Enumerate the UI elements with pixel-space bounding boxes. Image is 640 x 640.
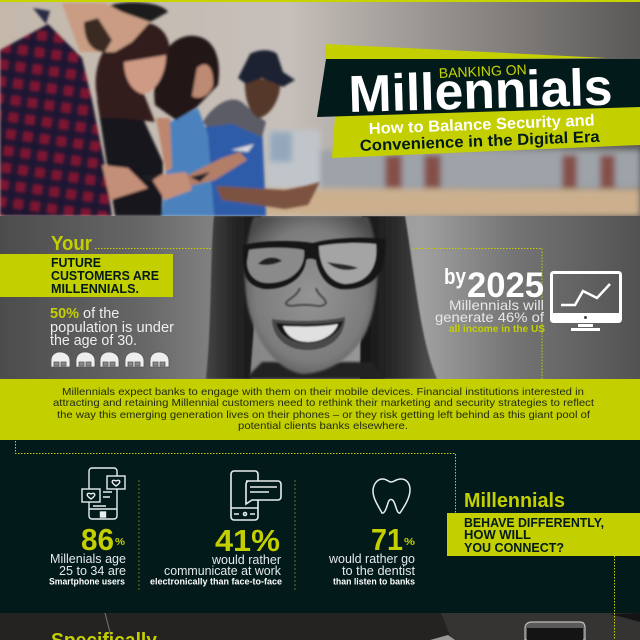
banner kicker: BANKING ON (438, 61, 527, 81)
stat: by 2025: all income in the US (449, 324, 545, 335)
banner subtitle: Convenience in the Digital Era (360, 129, 600, 155)
stat: 71 percent: 71 (371, 522, 403, 557)
callout: behave differently: HOW WILL (464, 528, 531, 542)
stat: 50 percent under 30: population is under (50, 320, 174, 336)
banner title: Millennials (348, 59, 613, 124)
stat: 71 percent: to the dentist (342, 564, 416, 578)
callout: future customers: CUSTOMERS ARE (51, 269, 159, 283)
woman 3 (162, 108, 214, 216)
stat: 50 percent under 30: the age of 30. (50, 333, 137, 349)
title banner (317, 44, 640, 158)
intro paragraph band: attracting and retaining Millennial customers need to rethink their marketing and security strategies to reflect (53, 397, 594, 409)
stat: 86 percent: Smartphone users (49, 576, 125, 586)
callout: behave differently: YOU CONNECT? (464, 541, 564, 555)
phone on table (525, 622, 585, 640)
heading: millennials: Millennials (464, 490, 565, 512)
callout: behave differently: BEHAVE DIFFERENTLY, (464, 516, 604, 530)
man 4 (204, 122, 268, 216)
stat: 86 percent: 86 (81, 522, 114, 557)
banner subtitle (360, 112, 600, 155)
section: dark stats panel (0, 440, 640, 613)
intro paragraph band: Millennials expect banks to engage with them on their mobile devices. Financial institutions interested in (62, 386, 584, 398)
stat: 41 percent: electronically than face-to-face (150, 576, 282, 586)
callout: behave differently (447, 513, 640, 556)
hero photo: four millennials using phones (0, 0, 640, 216)
stat: 50 percent under 30 (50, 306, 174, 349)
heading: your: Your (51, 233, 92, 255)
callout: future customers (0, 254, 173, 297)
callout: future customers: MILLENNIALS. (51, 282, 139, 296)
stat: 71 percent (328, 479, 416, 586)
icon: monitor with rising chart (551, 272, 621, 331)
banner shapes (317, 44, 640, 158)
stat: 71 percent: would rather go (328, 552, 415, 566)
stat: 86 percent: 25 to 34 are (59, 564, 126, 578)
stat: 50 percent under 30: 50% of the (50, 306, 119, 322)
stat: by 2025: 2025 (467, 266, 544, 305)
stat: 41 percent: communicate at work (164, 564, 282, 578)
banner subtitle: How to Balance Security and (369, 112, 595, 138)
icon: smartphone with hearts (82, 468, 125, 519)
stat: by 2025: by (444, 264, 467, 289)
man 1 (106, 2, 168, 22)
stat: by 2025: Millennials will (449, 297, 544, 313)
intro paragraph band: the way this emerging generation lives on their phones – or they risk getting left behind as this giant pool of (57, 409, 590, 421)
woman 2 (97, 100, 163, 216)
stat: 41 percent (150, 471, 282, 586)
icons: five faces with glasses (51, 352, 169, 367)
stat: 41 percent: 41% (215, 523, 280, 558)
stat: 86 percent: Millenials age (50, 552, 126, 566)
stat: 86 percent (49, 468, 126, 586)
icon: phone with message bubble (231, 471, 281, 520)
portrait photo (206, 216, 437, 379)
stat: 86 percent: % (115, 537, 125, 548)
intro paragraph band (0, 379, 640, 440)
intro paragraph band: potential clients banks elsewhere. (238, 420, 408, 432)
icon: tooth (373, 479, 410, 513)
stat: by 2025 (435, 264, 545, 335)
stat: 71 percent: than listen to banks (333, 576, 415, 586)
stat: by 2025: generate 46% of (435, 309, 544, 325)
section: future customers with portrait (0, 216, 640, 379)
stat: 71 percent: % (404, 537, 415, 548)
dotted connector (95, 248, 542, 379)
stat: 41 percent: would rather (211, 553, 281, 567)
bottom photo strip (0, 613, 640, 640)
callout: future customers: FUTURE (51, 256, 101, 270)
top accent line (0, 0, 640, 2)
